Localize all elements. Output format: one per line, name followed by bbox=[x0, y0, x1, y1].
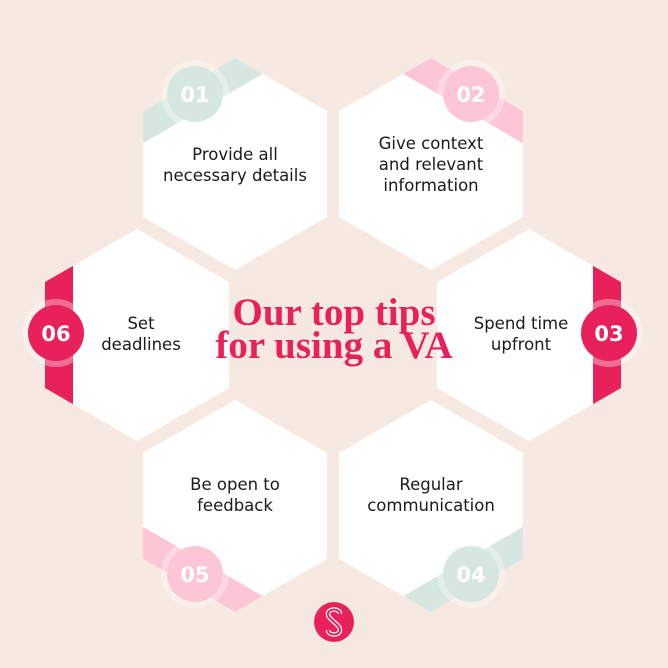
badge 06: 06 bbox=[41, 322, 71, 346]
text 06: Set bbox=[127, 314, 155, 333]
text 02: Give context bbox=[379, 134, 484, 153]
text 03: upfront bbox=[491, 335, 552, 354]
text 02: and relevant bbox=[379, 155, 484, 174]
text 04: Regular bbox=[399, 475, 463, 494]
text 02: information bbox=[383, 176, 479, 195]
panel: tip 01 bbox=[143, 58, 327, 270]
badge 01 bbox=[161, 60, 229, 128]
badge 01: 01 bbox=[180, 83, 210, 107]
icon: logo bbox=[314, 602, 354, 642]
title: for using a VA bbox=[215, 324, 453, 367]
text 05: feedback bbox=[197, 496, 273, 515]
text 01: Provide all bbox=[192, 145, 278, 164]
text 04: communication bbox=[367, 496, 495, 515]
panel: tip 04 bbox=[339, 400, 523, 612]
text 06: deadlines bbox=[101, 335, 181, 354]
badge 02 bbox=[437, 60, 505, 128]
text 03: Spend time bbox=[474, 314, 568, 333]
panel: tip 03 bbox=[437, 229, 643, 441]
badge 05: 05 bbox=[180, 563, 210, 587]
badge 03 bbox=[575, 299, 643, 367]
text 01: necessary details bbox=[163, 166, 307, 185]
badge 04: 04 bbox=[456, 563, 486, 587]
badge 03: 03 bbox=[594, 322, 624, 346]
panel: tip 05 bbox=[143, 400, 327, 612]
badge 05 bbox=[161, 540, 229, 608]
text 05: Be open to bbox=[190, 475, 280, 494]
badge 02: 02 bbox=[456, 83, 486, 107]
title: Our top tips bbox=[232, 291, 436, 334]
panel: tip 02 bbox=[339, 58, 523, 270]
panel: tip 06 bbox=[22, 229, 229, 441]
badge 04 bbox=[437, 540, 505, 608]
badge 06 bbox=[22, 299, 90, 367]
